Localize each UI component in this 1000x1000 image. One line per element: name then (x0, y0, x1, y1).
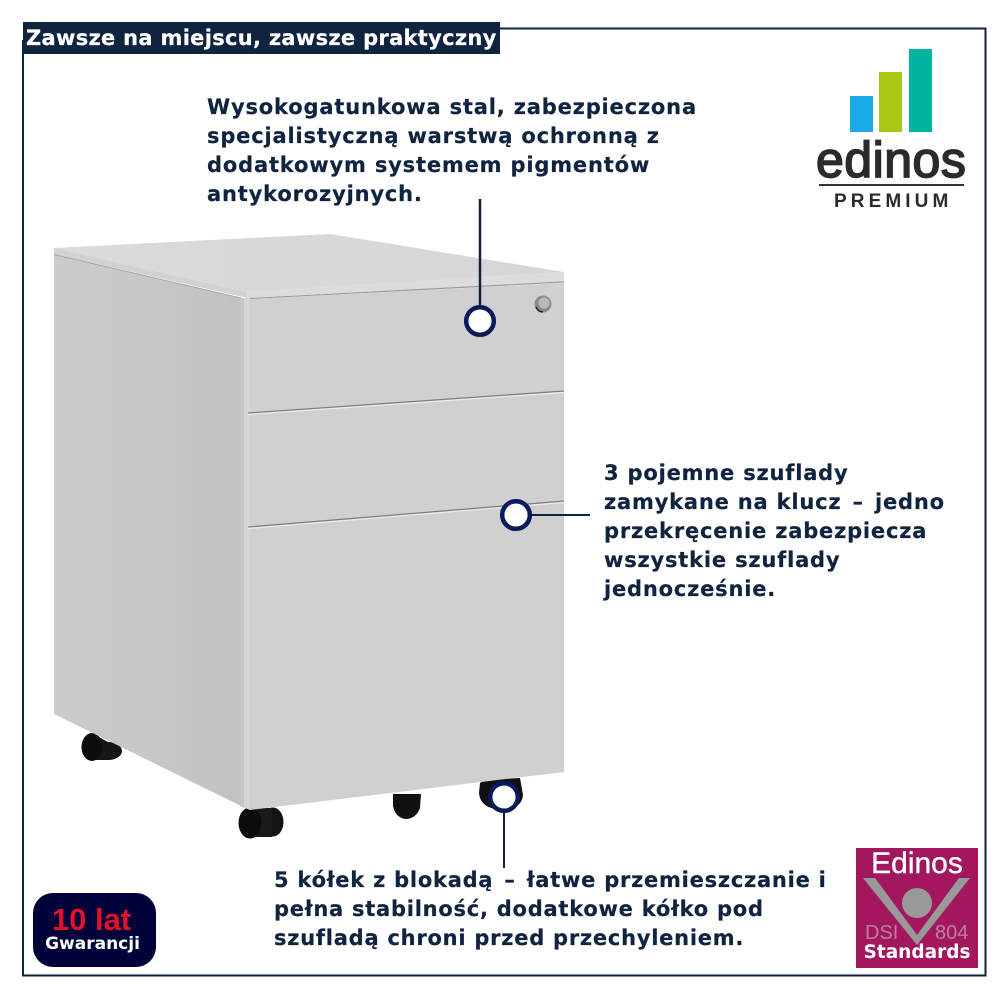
logo bars (850, 49, 932, 132)
text block: drawers: jednocześnie. (604, 577, 776, 601)
text block: steel (207, 95, 697, 206)
standards subtitle: Standards (864, 942, 970, 963)
standards code right: 804 (935, 922, 968, 944)
callout marker: steel (466, 199, 494, 335)
text block: drawers: 3 pojemne szuflady (604, 461, 849, 485)
text block: wheels (274, 868, 827, 950)
cabinet corner strip (240, 298, 250, 810)
front-left wheels (238, 808, 284, 838)
lock (534, 296, 552, 312)
title text: Zawsze na miejscu, zawsze praktyczny (26, 26, 497, 50)
badge: Edinos standards (856, 848, 978, 968)
text block: drawers: wszystkie szuflady (604, 548, 840, 572)
front-right wheel (479, 778, 523, 809)
logo: edinos premium (816, 49, 966, 212)
text block: steel: dodatkowym systemem pigmentów (207, 153, 650, 177)
back-left wheels (82, 733, 122, 761)
cabinet top edge (247, 272, 564, 298)
logo wordmark: edinos (816, 132, 966, 188)
logo rule (819, 184, 964, 186)
callout marker: drawers (502, 501, 590, 529)
text block: drawers: przekręcenie zabezpiecza (604, 519, 927, 543)
cabinet front panel (250, 283, 564, 810)
standards code left: DSI (865, 922, 898, 944)
text block: steel: specjalistyczną warstwą ochronną z (207, 124, 660, 148)
text block: wheels: pełna stabilność, dodatkowe kółko pod (274, 897, 764, 921)
badge label: Gwarancji (45, 934, 140, 954)
text block: drawers: zamykane na klucz – jedno (604, 490, 945, 514)
text block: steel: Wysokogatunkowa stal, zabezpieczona (207, 95, 697, 119)
title bar (23, 22, 500, 54)
standards graphic (863, 878, 970, 945)
text block: wheels: 5 kółek z blokadą – łatwe przemieszczanie i (274, 868, 827, 892)
badge: 10 years warranty (33, 893, 156, 967)
text block: drawers (603, 461, 945, 601)
middle wheel (393, 794, 421, 819)
callout marker: wheels (490, 783, 518, 868)
badge value: 10 lat (52, 902, 131, 937)
text block: wheels: szufladą chroni przed przechyleniem. (274, 926, 744, 950)
cabinet side panel (54, 254, 241, 806)
text block: steel: antykorozyjnych. (207, 182, 423, 206)
cabinet top surface (54, 234, 564, 292)
logo subtitle: PREMIUM (834, 191, 952, 212)
drawer seams (248, 391, 564, 528)
